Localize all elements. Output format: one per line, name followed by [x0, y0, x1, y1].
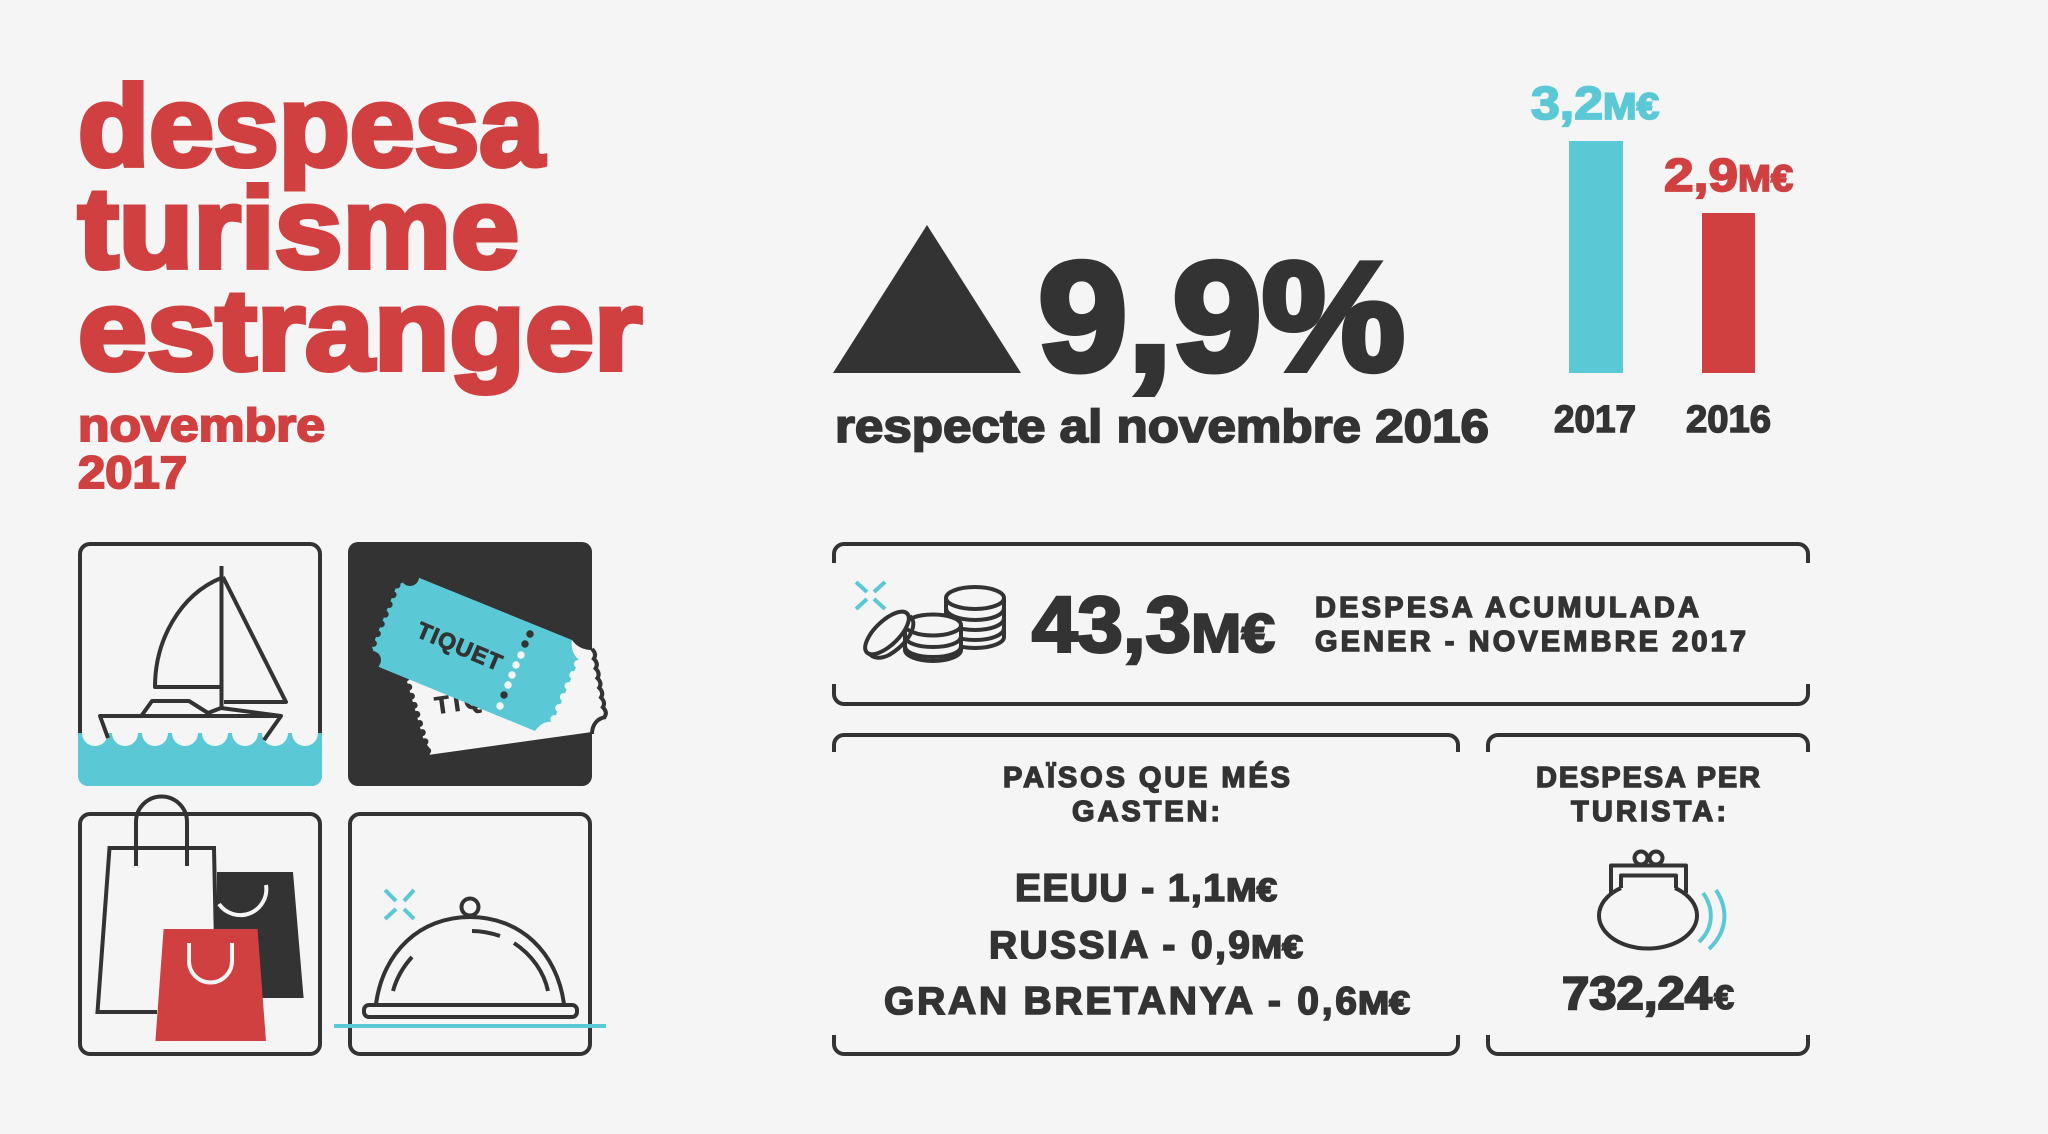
value 2017: [1531, 77, 1659, 129]
icon: food cloche: [334, 814, 606, 1054]
total caption: [1315, 592, 1746, 658]
icon: sailboat: [78, 544, 322, 786]
panel heading: GASTEN:: [1072, 796, 1220, 828]
panel: top spending countries: [834, 735, 1458, 1054]
country: Russia: M€: [1251, 929, 1303, 965]
country: Gran Bretanya: GRAN BRETANYA - 0,6: [884, 980, 1357, 1023]
bar 2017: [1569, 141, 1623, 373]
year labels: [1554, 399, 1771, 441]
icon: shopping bags: [80, 796, 320, 1054]
subtitle: date: novembre: [78, 399, 325, 451]
white ticket: TIQ: [433, 686, 488, 720]
title: [78, 64, 642, 394]
country: Gran Bretanya: M€: [1358, 985, 1410, 1021]
panel heading: DESPESA PER: [1536, 762, 1760, 794]
total caption: GENER - NOVEMBRE 2017: [1315, 626, 1746, 658]
icon: tickets: [348, 542, 606, 786]
country: EEUU: EEUU - 1,1: [1015, 867, 1225, 910]
total caption: DESPESA ACUMULADA: [1315, 592, 1699, 624]
sparkle: [856, 582, 885, 609]
teal ticket: TIQUET: [413, 617, 506, 676]
icon: purse: [1599, 852, 1724, 949]
bar 2016: [1702, 213, 1755, 373]
headline caption: respecte al novembre 2016: [835, 400, 1489, 452]
total value: [1032, 580, 1275, 668]
title: turisme: [78, 166, 519, 292]
panel heading: [1536, 762, 1760, 828]
panel: accumulated spending: [834, 544, 1808, 704]
panel heading: TURISTA:: [1571, 796, 1726, 828]
value 2017: M€: [1603, 86, 1659, 127]
headline value: 9,9%: [1038, 230, 1405, 403]
value 2016: [1664, 149, 1793, 201]
panel heading: [1003, 760, 1290, 828]
total value: 43,3: [1032, 580, 1191, 668]
panel heading: PAÏSOS QUE MÉS: [1003, 760, 1290, 794]
title: estranger: [78, 268, 642, 394]
bar chart: [1531, 77, 1793, 441]
value per tourist: €: [1714, 979, 1734, 1017]
increase triangle: [833, 225, 1021, 373]
teal ticket: [363, 568, 579, 731]
year labels: 2016: [1686, 399, 1771, 441]
year labels: 2017: [1554, 399, 1636, 441]
value per tourist: 732,24: [1562, 967, 1712, 1019]
panel: spending per tourist: [1488, 735, 1808, 1054]
icon: coins: [859, 587, 1004, 661]
white ticket: [406, 640, 606, 762]
total value: M€: [1191, 602, 1275, 664]
value 2016: M€: [1738, 158, 1793, 199]
value 2017: 3,2: [1531, 77, 1603, 129]
subtitle: date: [78, 399, 325, 498]
country: EEUU: M€: [1226, 872, 1277, 908]
subtitle: date: 2017: [78, 447, 187, 498]
country: Russia: RUSSIA - 0,9: [989, 924, 1250, 967]
title: despesa: [78, 64, 546, 190]
value 2016: 2,9: [1664, 149, 1738, 201]
